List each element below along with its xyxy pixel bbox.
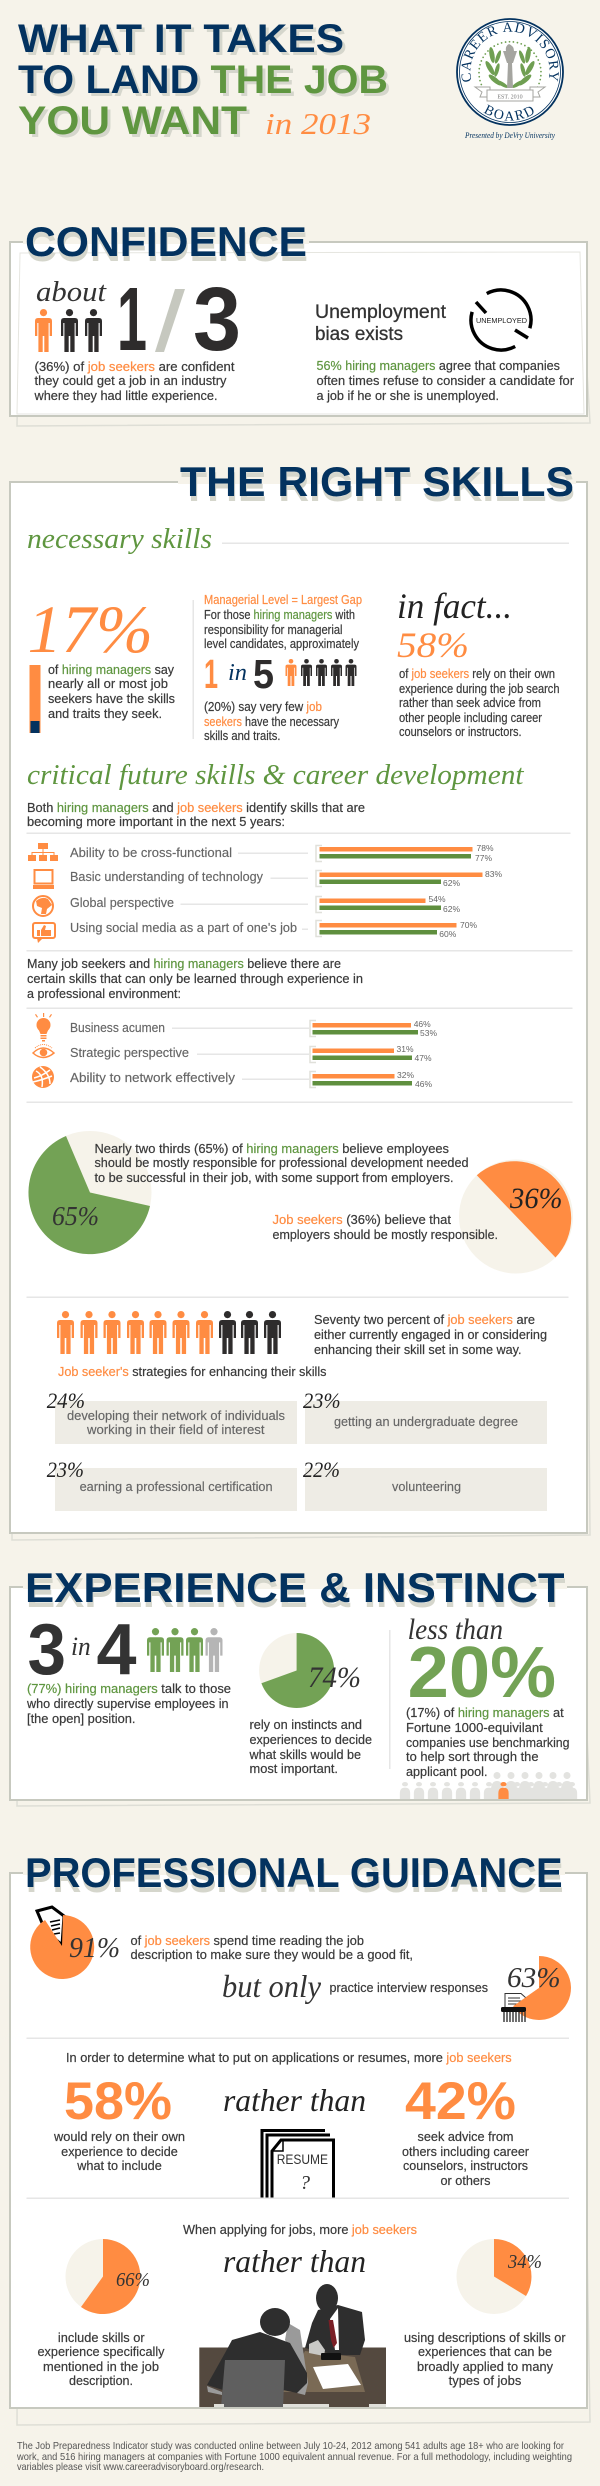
in fact callout: counselors or instructors. [399, 725, 522, 739]
managerial level callout: seekers have the necessary [204, 715, 340, 729]
icon: globe [33, 896, 53, 916]
confidence text [33, 360, 235, 403]
pie chart: job seekers 36%: 36% [509, 1182, 562, 1215]
pie chart: 74%: most important. [250, 1762, 338, 1776]
footer: methodology note: variables please visit www.careeradvisoryboard.org/research. [17, 2461, 264, 2473]
confidence text: they could get a job in an industry [34, 374, 227, 388]
pie chart: 34% [456, 2239, 542, 2314]
text: hiring managers responsibility [94, 1142, 469, 1185]
hiring manager bias text [316, 359, 574, 403]
row: business acumen: 53% [420, 1028, 437, 1038]
title: in 2013 [265, 106, 371, 141]
unemployment bias heading [315, 302, 447, 345]
pie chart: 74%: rely on instincts and [250, 1718, 362, 1732]
in fact callout: 58% [397, 625, 469, 665]
text: skills in job description: include skills or [58, 2331, 145, 2345]
in fact callout: of job seekers rely on their own [399, 667, 555, 681]
pie chart: 34%: 34% [507, 2251, 542, 2273]
text: reading the job description [130, 1934, 413, 1962]
58% statistic: what to include [76, 2159, 162, 2173]
text: broadly applicable skills: experiences that can be [418, 2345, 552, 2359]
row: cross-functional: 78% [476, 843, 494, 853]
managerial level callout: level candidates, approximately [204, 637, 360, 651]
pie chart: 74%: 74% [308, 1661, 361, 1694]
strategy card: 24% [47, 1388, 297, 1444]
heading: the right skills: THE RIGHT SKILLS [180, 458, 574, 505]
pie chart: job seekers 36% [459, 1160, 573, 1274]
strategy card: 24%: developing their network of individuals [67, 1409, 285, 1423]
row: cross-functional [70, 843, 494, 863]
row: network effectively: 32% [397, 1070, 414, 1080]
text: in order to determine: In order to determine what to put on applications or resumes, more job seekers [66, 2051, 512, 2065]
icon: network globe [32, 1066, 54, 1088]
text: hiring managers responsibility: Nearly two thirds (65%) of hiring managers believe employees [94, 1142, 449, 1156]
row: business acumen: Business acumen [70, 1021, 165, 1035]
42% statistic: counselors, instructors [403, 2159, 528, 2173]
row: technology: 83% [485, 869, 502, 879]
text: but only practice interview responses: but only [222, 1968, 322, 2004]
row: technology: 62% [443, 878, 460, 888]
row: strategic perspective [70, 1044, 432, 1063]
text: reading the job description: description to make sure they would be a good fit, [130, 1948, 413, 1962]
row: global perspective: 62% [443, 904, 460, 914]
strategies heading: Job seeker's strategies for enhancing their skills [58, 1365, 326, 1379]
text: hiring managers responsibility: should be mostly responsible for professional development needed [94, 1156, 469, 1170]
42% statistic: 42% [405, 2072, 516, 2131]
illustration: job interview at desk [199, 2284, 386, 2407]
intro text: future skills: becoming more important in the next 5 years: [27, 815, 285, 829]
less than 20% statistic: (17%) of hiring managers at [406, 1706, 564, 1720]
confidence text: (36%) of job seekers are confident [34, 360, 235, 374]
title: TO LAND THE JOB [18, 58, 388, 102]
row: social media: 60% [439, 929, 457, 939]
icon: eye [33, 1044, 54, 1058]
42% statistic [402, 2072, 529, 2188]
icon: resume stack: ? [300, 2172, 310, 2194]
row: business acumen [70, 1019, 437, 1038]
logo: Career Advisory Board seal: BOARD [484, 104, 534, 120]
managerial level callout: responsibility for managerial [204, 623, 342, 637]
chart: future skills bars [28, 843, 502, 943]
icon: resume stack: RESUME [277, 2151, 328, 2167]
heading: professional guidance: PROFESSIONAL GUIDANCE [25, 1849, 563, 1896]
intro text: future skills [27, 801, 365, 829]
strategy card: 23% degree: getting an undergraduate degree [334, 1415, 518, 1429]
row: cross-functional: Ability to be cross-functional [70, 846, 232, 860]
icon: unemployed circular arrows: UNEMPLOYED [476, 316, 528, 325]
unemployment bias heading: bias exists [315, 324, 403, 345]
pie chart: 66%: 66% [116, 2269, 150, 2291]
3 in 4 statistic [26, 1610, 231, 1726]
pie chart: 66% [66, 2239, 150, 2314]
logo: Career Advisory Board seal [456, 18, 564, 126]
rather than label: rather than [223, 2082, 366, 2118]
hiring manager bias text: often times refuse to consider a candidate for [316, 374, 574, 388]
subheading: necessary skills: necessary skills [27, 524, 212, 555]
panel: professional guidance [10, 1849, 590, 2425]
text: broadly applicable skills [404, 2331, 566, 2388]
icon: laptop [33, 870, 54, 889]
58% statistic: 58% [64, 2072, 172, 2131]
row: global perspective: Global perspective [70, 896, 174, 910]
less than 20% statistic: companies use benchmarking [406, 1736, 570, 1750]
pie chart: 74%: what skills would be [248, 1748, 361, 1762]
3 in 4 statistic: who directly supervise employees in [26, 1697, 229, 1711]
3 in 4 statistic: in [71, 1632, 91, 1661]
text: job seekers responsibility: Job seekers (36%) believe that [272, 1213, 452, 1227]
title: WHAT IT TAKES [18, 17, 344, 61]
text: but only practice interview responses [222, 1968, 488, 2004]
pie chart: 63% with shredder icon: 63% [507, 1963, 561, 1994]
panel: the right skills [10, 458, 590, 1540]
row: technology: Basic understanding of technology [70, 870, 264, 884]
strategy card: 23% degree [303, 1388, 547, 1444]
text: but only practice interview responses: practice interview responses [330, 1981, 488, 1995]
text: skills in job description [38, 2331, 165, 2388]
text: broadly applicable skills: broadly applied to many [417, 2360, 554, 2374]
text: seventy two percent: Seventy two percent of job seekers are [314, 1313, 535, 1327]
42% statistic: others including career [402, 2145, 529, 2159]
58% statistic [53, 2072, 185, 2173]
row: network effectively: Ability to network effectively [70, 1071, 236, 1085]
row: global perspective [70, 894, 460, 914]
about one third statistic: 1 [117, 270, 147, 370]
pie chart: 74%: experiences to decide [250, 1733, 372, 1747]
icon: org chart [28, 843, 58, 861]
in fact callout: other people including career [399, 711, 542, 725]
text: skills in job description: description. [69, 2374, 133, 2388]
text: skills in job description: mentioned in the job [43, 2360, 159, 2374]
icon: light bulb [35, 1013, 52, 1042]
subheading: critical future skills: critical future skills & career development [27, 760, 525, 791]
pie chart: 63% with shredder icon [501, 1956, 571, 2022]
managerial level callout: 5 [253, 651, 274, 697]
17 percent statistic: nearly all or most job [48, 677, 168, 691]
strategy card: 22% volunteering: 22% [303, 1457, 340, 1482]
row: business acumen: 46% [414, 1019, 431, 1029]
managerial level callout: (20%) say very few job [204, 700, 322, 714]
text: job seekers responsibility [272, 1213, 498, 1242]
strategy card: 24%: working in their field of interest [86, 1423, 265, 1437]
strategy card: 23% certification: 23% [47, 1457, 84, 1482]
17 percent statistic: 17% [28, 591, 153, 667]
text: broadly applicable skills: types of jobs [449, 2374, 521, 2388]
3 in 4 statistic: 4 [96, 1610, 136, 1690]
logo: Career Advisory Board seal: EST. 2010 [497, 94, 523, 100]
pie chart: hiring managers 65%: 65% [52, 1201, 99, 1231]
intro text: experience skills: a professional environment: [27, 987, 181, 1001]
pie chart: 74% [248, 1633, 372, 1776]
chart: experience skills bars [32, 1013, 437, 1089]
pie chart: 91% with document icon [30, 1907, 120, 1979]
17 percent statistic [28, 591, 175, 733]
pie chart: 91% with document icon: 91% [69, 1933, 120, 1964]
managerial level callout [204, 593, 362, 743]
title [18, 17, 388, 143]
crowd graphic [400, 1772, 577, 1799]
hiring manager bias text: a job if he or she is unemployed. [316, 389, 499, 403]
strategy card: 23% certification: earning a professional certification [80, 1480, 273, 1494]
text: seventy two percent: either currently engaged in or considering [314, 1328, 547, 1342]
in fact callout: in fact... [397, 586, 512, 626]
about one third statistic: 3 [193, 270, 241, 370]
logo: Career Advisory Board seal: CAREER ADVISORY [462, 22, 559, 82]
strategy card: 23% certification [47, 1457, 297, 1511]
icon: unemployed circular arrows [460, 279, 542, 361]
in fact callout: rather than seek advice from [399, 696, 541, 710]
footer: methodology note [16, 2440, 572, 2473]
less than 20% statistic: applicant pool. [406, 1765, 488, 1779]
title: YOU WANT [18, 99, 247, 143]
hiring manager bias text: 56% hiring managers agree that companies [316, 359, 560, 373]
intro text: experience skills: certain skills that can only be learned through experience in [27, 972, 363, 986]
pie chart: hiring managers 65% [28, 1131, 152, 1254]
17 percent statistic: seekers have the skills [48, 692, 175, 706]
icon: resume stack [262, 2130, 334, 2198]
row: strategic perspective: 31% [396, 1044, 414, 1054]
icon row: seventy two percent people [57, 1311, 281, 1354]
row: technology [70, 869, 502, 888]
row: strategic perspective: Strategic perspective [70, 1046, 189, 1060]
managerial level callout: For those hiring managers with [204, 608, 355, 622]
unemployment bias heading: Unemployment [315, 302, 447, 323]
text: when applying for jobs: When applying for jobs, more job seekers [183, 2223, 417, 2237]
panel: experience and instinct [10, 1564, 590, 1806]
58% statistic: experience to decide [61, 2145, 178, 2159]
row: social media: 70% [460, 920, 477, 930]
heading: experience and instinct: EXPERIENCE & INSTINCT [25, 1564, 565, 1611]
managerial level callout: 1 [204, 651, 218, 697]
text: hiring managers responsibility: to be successful in their job, with some support from employers. [94, 1171, 454, 1185]
in fact callout [397, 586, 560, 739]
strategy card: 22% volunteering [303, 1457, 547, 1511]
42% statistic: or others [440, 2174, 490, 2188]
row: social media: Using social media as a part of one's job [70, 921, 297, 935]
row: strategic perspective: 47% [414, 1053, 432, 1063]
less than 20% statistic: less than [408, 1613, 503, 1646]
17 percent statistic: and traits they seek. [48, 707, 162, 721]
heading: confidence: CONFIDENCE [25, 218, 307, 265]
icon: thumbs up [33, 923, 55, 943]
text: reading the job description: of job seekers spend time reading the job [130, 1934, 364, 1948]
intro text: experience skills [27, 957, 363, 1001]
less than 20% statistic: Fortune 1000-equivilant [406, 1721, 543, 1735]
less than 20% statistic: 20% [408, 1633, 556, 1713]
3 in 4 statistic: [the open] position. [27, 1712, 136, 1726]
row: cross-functional: 77% [475, 853, 492, 863]
managerial level callout: skills and traits. [204, 729, 280, 743]
managerial level callout: Managerial Level = Largest Gap [204, 593, 362, 607]
strategy card: 24%: 24% [47, 1388, 85, 1413]
row: network effectively: 46% [415, 1079, 432, 1089]
strategy card: 22% volunteering: volunteering [392, 1480, 461, 1494]
text: job seekers responsibility: employers should be mostly responsible. [272, 1228, 498, 1242]
row: global perspective: 54% [428, 894, 446, 904]
about one third statistic [35, 270, 241, 370]
text: seventy two percent [314, 1313, 547, 1357]
text: skills in job description: experience specifically [38, 2345, 165, 2359]
text: broadly applicable skills: using descriptions of skills or [404, 2331, 566, 2345]
text: seventy two percent: enhancing their skill set in some way. [314, 1343, 522, 1357]
presented by caption: Presented by DeVry University [464, 130, 555, 140]
row: social media [70, 920, 477, 939]
3 in 4 statistic: 3 [28, 1610, 66, 1690]
in fact callout: experience during the job search [399, 682, 560, 696]
17 percent statistic: of hiring managers say [48, 663, 175, 677]
3 in 4 statistic: (77%) hiring managers talk to those [27, 1682, 231, 1696]
row: network effectively [70, 1070, 432, 1089]
managerial level callout: in [228, 660, 247, 686]
42% statistic: seek advice from [418, 2130, 514, 2144]
confidence text: where they had little experience. [33, 389, 218, 403]
58% statistic: would rely on their own [53, 2130, 185, 2144]
panel: confidence [10, 218, 590, 426]
intro text: experience skills: Many job seekers and hiring managers believe there are [27, 957, 341, 971]
less than 20% statistic [406, 1613, 570, 1779]
rather than label: rather than [223, 2243, 366, 2279]
intro text: future skills: Both hiring managers and job seekers identify skills that are [27, 801, 365, 815]
strategy card: 23% degree: 23% [303, 1388, 341, 1413]
less than 20% statistic: to help sort through the [406, 1750, 539, 1764]
about one third statistic: about [36, 276, 107, 308]
